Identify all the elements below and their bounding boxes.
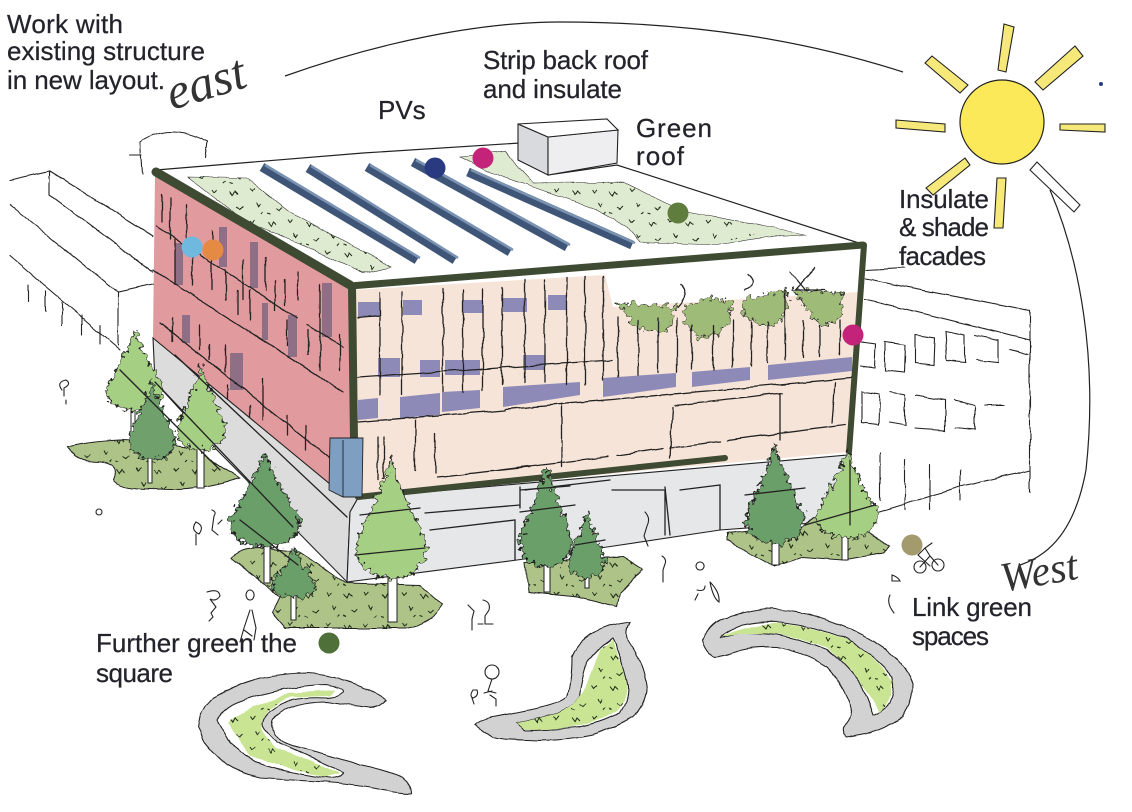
ground shrubs <box>68 440 890 628</box>
building lines across trees <box>120 355 875 565</box>
marker dots <box>182 82 1103 654</box>
roof box <box>518 119 618 175</box>
label: link green spaces: spaces <box>912 621 989 651</box>
label: insulate facades: & shade <box>899 212 989 242</box>
sun <box>896 24 1105 228</box>
label: strip back roof: and insulate <box>483 74 622 104</box>
label: green roof: roof <box>636 141 685 171</box>
base sketch lines <box>425 480 720 560</box>
label: strip back roof: Strip back roof <box>483 45 649 75</box>
planter: middle <box>475 622 647 740</box>
background buildings <box>10 132 1030 520</box>
label: structure: existing structure <box>7 36 205 66</box>
handwriting east: east <box>159 43 253 121</box>
left base <box>153 338 358 582</box>
handwriting west: West <box>997 543 1083 602</box>
PV panels <box>262 160 635 260</box>
label: link green spaces: Link green <box>912 592 1032 622</box>
label: structure: Work with <box>7 9 123 39</box>
label: insulate facades: facades <box>899 241 986 271</box>
green roof patches <box>188 152 807 273</box>
facade sketch lines <box>358 268 852 480</box>
sun path arc <box>285 22 1090 565</box>
label: further green: square <box>96 658 173 688</box>
entrance panel <box>329 438 363 497</box>
facade windows <box>358 295 852 420</box>
planter: left <box>198 673 412 793</box>
west facade <box>153 175 350 484</box>
south base <box>347 455 853 582</box>
label: insulate facades: Insulate <box>899 184 989 214</box>
label: structure: in new layout. <box>7 65 165 95</box>
climbing plants <box>617 290 842 338</box>
trees <box>107 330 877 598</box>
roof <box>156 143 865 285</box>
planter: right <box>703 609 913 738</box>
label: green roof: Green <box>636 113 712 143</box>
tree trunks <box>131 405 848 622</box>
people and cyclist <box>60 380 944 706</box>
facade frame <box>156 172 864 497</box>
label: PVs: PVs <box>378 95 426 125</box>
label: further green: Further green the <box>96 628 297 658</box>
south facade <box>352 275 858 497</box>
